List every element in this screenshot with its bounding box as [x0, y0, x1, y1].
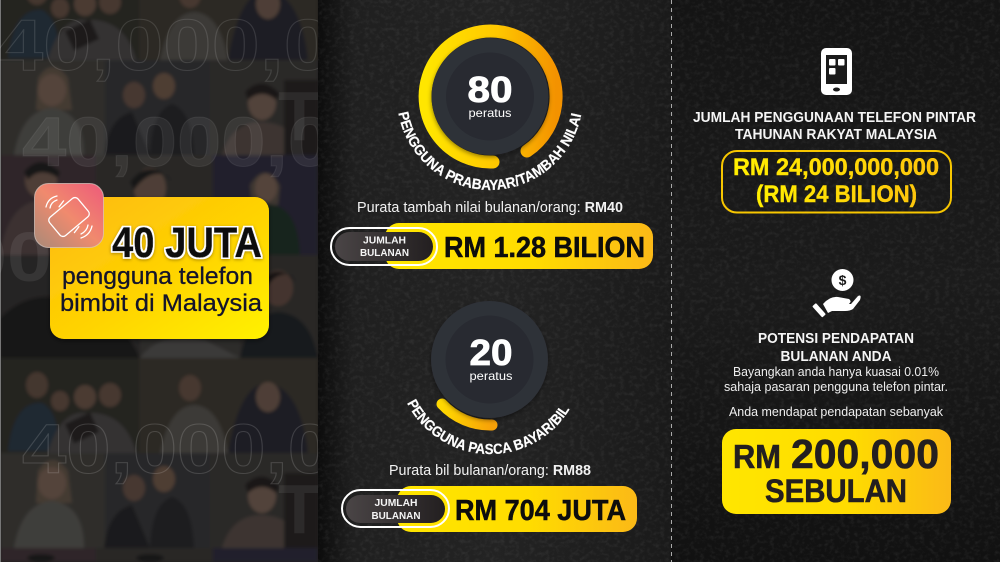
heading: monthly income potential: BULANAN ANDA [780, 349, 892, 365]
icon: hand with coin [812, 269, 861, 318]
gauge: 80 percent [398, 24, 582, 190]
panel: photo collage: T [278, 470, 321, 548]
card: 40 juta [50, 197, 269, 339]
box: RM 24 bilion [722, 151, 951, 212]
icon: smartphone [821, 48, 852, 95]
pill: RM 1.28 bilion [331, 223, 653, 269]
card text: bimbit di Malaysia [60, 290, 262, 317]
panel: photo collage: T [278, 77, 321, 155]
heading: monthly income potential: POTENSI PENDAPATAN [758, 331, 914, 347]
icon: hand with coin: $ [839, 272, 847, 288]
pill: RM 1.28 bilion: JUMLAH [363, 234, 406, 246]
box: RM 200,000 sebulan: SEBULAN [765, 473, 907, 509]
icon: vibrating phone [34, 184, 104, 248]
panel: photo collage [0, 0, 318, 562]
value: 20 [470, 332, 512, 373]
text: income description: Anda mendapat pendapatan sebanyak [729, 405, 944, 419]
ring [442, 404, 492, 425]
box: RM 24 bilion: RM 24,000,000,000 [733, 154, 939, 181]
panel: photo collage: 40,000,00 [0, 6, 380, 86]
curved label: PENGGUNA PASCA BAYAR/BIL [407, 398, 570, 454]
ring [425, 31, 556, 162]
pill: RM 704 juta: RM 704 JUTA [455, 495, 626, 527]
text: income description: sahaja pasaran pengguna telefon pintar. [724, 380, 948, 394]
gauge: 20 percent [407, 301, 570, 454]
heading: monthly income potential [758, 331, 914, 365]
pill: RM 704 juta: BULANAN [372, 510, 420, 522]
panel: photo collage: 40,000,0 [22, 410, 332, 488]
panel: photo collage: 40,000,0 [22, 103, 332, 181]
background: textured dark panels [318, 0, 1000, 562]
card text [60, 263, 262, 317]
pill: RM 704 juta: JUMLAH [374, 497, 418, 509]
heading: annual usage: JUMLAH PENGGUNAAN TELEFON PINTAR [693, 110, 976, 126]
box: RM 200,000 sebulan: 200,000 [791, 431, 939, 477]
headline: 40 juta: 40 JUTA [112, 219, 262, 267]
pill: RM 1.28 bilion: RM 1.28 BILION [444, 232, 645, 264]
gauge: 80 percent: peratus [468, 106, 512, 120]
curved label: PENGGUNA PRABAYAR/TAMBAH NILAI [398, 112, 582, 190]
divider [670, 0, 672, 562]
card text: pengguna telefon [62, 263, 253, 290]
text: income description [724, 365, 948, 419]
box: RM 200,000 sebulan [722, 429, 951, 514]
pill: RM 704 juta [342, 486, 637, 532]
value: 80 [468, 69, 512, 110]
heading: annual usage: TAHUNAN RAKYAT MALAYSIA [735, 127, 937, 143]
average bill text: Purata bil bulanan/orang: RM88 [389, 463, 591, 479]
box: RM 24 bilion: (RM 24 BILION) [756, 181, 917, 208]
average top-up text: Purata tambah nilai bulanan/orang: RM40 [357, 200, 623, 216]
gauge: 20 percent: peratus [470, 369, 512, 383]
box: RM 200,000 sebulan: RM [733, 438, 781, 475]
pill: RM 1.28 bilion: BULANAN [360, 247, 409, 259]
heading: annual usage [693, 110, 976, 143]
text: income description: Bayangkan anda hanya kuasai 0.01% [733, 365, 939, 379]
